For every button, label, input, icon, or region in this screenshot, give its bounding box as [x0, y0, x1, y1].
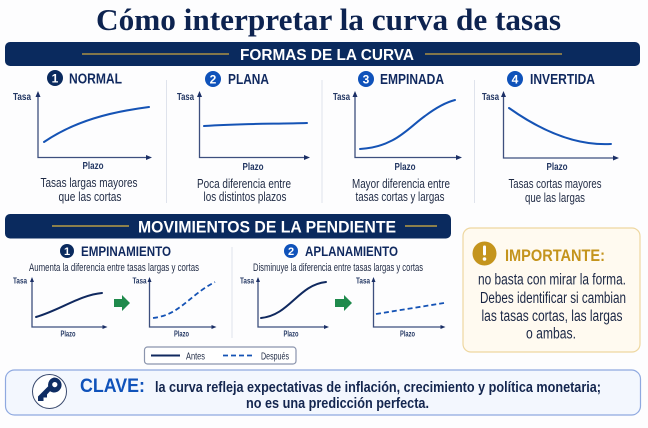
- legend: Después: [261, 352, 289, 362]
- panel: plana: Poca diferencia entre: [197, 177, 291, 191]
- panel: normal: NORMAL: [69, 72, 122, 88]
- panel: normal: 1: [52, 72, 59, 86]
- panel: aplanamiento: Tasa: [356, 276, 370, 286]
- banner: formas de la curva: [5, 42, 640, 66]
- panel: plana: Plazo: [242, 162, 264, 173]
- panel: aplanamiento: Disminuye la diferencia entre tasas largas y cortas: [253, 262, 423, 274]
- panel: invertida: [482, 71, 619, 205]
- legend: [144, 347, 296, 364]
- panel: empinada: 3: [363, 72, 370, 86]
- callout: clave: no es una predicción perfecta.: [246, 395, 429, 412]
- panel: aplanamiento: APLANAMIENTO: [305, 244, 398, 259]
- icon: key: [32, 374, 66, 408]
- panel: empinada: Plazo: [394, 162, 416, 173]
- panel: invertida: 4: [512, 72, 519, 86]
- panel: empinamiento: EMPINAMIENTO: [81, 244, 171, 259]
- panel: empinada: Tasa: [333, 92, 350, 103]
- panel: invertida: Tasas cortas mayores: [508, 177, 602, 191]
- icon: exclamation: [472, 242, 496, 266]
- panel: normal: [13, 70, 152, 204]
- panel: normal: Plazo: [82, 161, 104, 172]
- panel: plana: PLANA: [228, 72, 269, 88]
- panel: normal: que las cortas: [58, 190, 122, 204]
- panel: aplanamiento: Plazo: [284, 330, 299, 338]
- panel: invertida: Plazo: [546, 162, 568, 173]
- panel: plana: 2: [210, 72, 217, 86]
- icon: green arrow: [114, 295, 130, 311]
- panel: empinamiento: [13, 244, 216, 338]
- callout: importante: IMPORTANTE:: [505, 246, 605, 265]
- icon: green arrow: [335, 295, 352, 311]
- panel: invertida: INVERTIDA: [530, 72, 595, 88]
- panel: aplanamiento: 2: [288, 246, 294, 258]
- panel: empinada: EMPINADA: [380, 72, 444, 88]
- callout: importante: o ambas.: [526, 326, 576, 342]
- banner: movimientos de la pendiente: [5, 214, 451, 238]
- panel: plana: [177, 71, 310, 204]
- panel: empinamiento: Tasa: [13, 276, 27, 286]
- callout: clave: CLAVE:: [80, 375, 145, 397]
- panel: aplanamiento: Tasa: [240, 276, 254, 286]
- panel: normal: Tasa: [13, 92, 31, 103]
- banner: movimientos de la pendiente: MOVIMIENTOS DE LA PENDIENTE: [138, 218, 396, 236]
- callout: clave: [6, 370, 640, 415]
- title: Cómo interpretar la curva de tasas: [96, 2, 561, 37]
- panel: empinamiento: Aumenta la diferencia entre tasas largas y cortas: [29, 262, 199, 274]
- panel: empinamiento: Plazo: [60, 330, 76, 338]
- panel: invertida: que las largas: [525, 191, 585, 205]
- panel: empinada: Mayor diferencia entre: [352, 177, 450, 191]
- panel: plana: los distintos plazos: [204, 190, 286, 204]
- panel: invertida: Tasa: [482, 92, 499, 103]
- panel: empinamiento: Plazo: [174, 330, 189, 338]
- callout: importante: [463, 228, 640, 352]
- panel: empinamiento: Tasa: [132, 276, 147, 286]
- legend: Antes: [186, 352, 205, 362]
- panel: empinada: tasas cortas y largas: [356, 190, 444, 204]
- panel: empinamiento: 1: [64, 246, 70, 258]
- banner: formas de la curva: FORMAS DE LA CURVA: [240, 47, 414, 64]
- panel: aplanamiento: [240, 244, 446, 338]
- panel: empinada: [333, 71, 462, 204]
- panel: plana: Tasa: [177, 92, 194, 103]
- panel: normal: Tasas largas mayores: [40, 176, 138, 190]
- panel: aplanamiento: Plazo: [400, 330, 415, 338]
